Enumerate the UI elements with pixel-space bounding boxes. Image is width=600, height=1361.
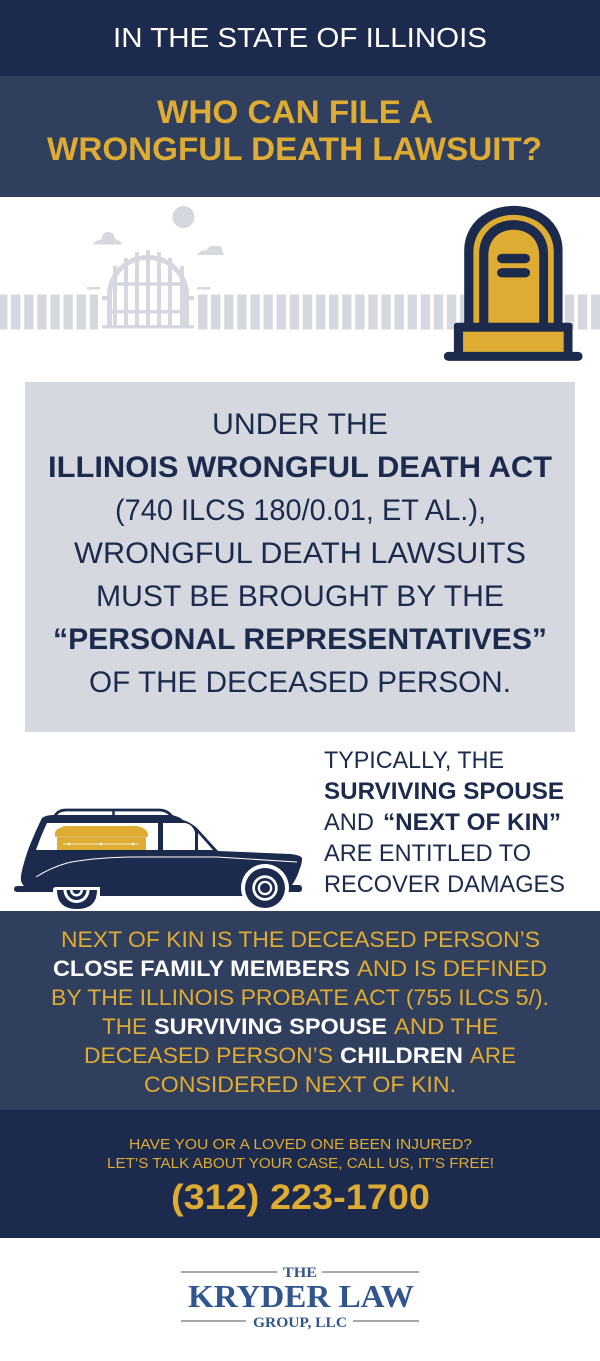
panel: Illinois Wrongful Death Act: MUST BE BROUGHT BY THE bbox=[96, 580, 504, 613]
text block: surviving spouse and next of kin: “NEXT OF KIN” bbox=[383, 809, 561, 836]
panel: call to action: LET’S TALK ABOUT YOUR CASE, CALL US, IT’S FREE! bbox=[107, 1155, 494, 1172]
panel: next of kin definition: NEXT OF KIN IS THE DECEASED PERSON’S bbox=[61, 927, 540, 952]
title banner: WRONGFUL DEATH LAWSUIT? bbox=[47, 131, 542, 167]
icon: tombstone bbox=[444, 206, 582, 361]
panel: Illinois Wrongful Death Act: UNDER THE bbox=[212, 408, 388, 441]
panel: next of kin definition: DECEASED PERSON’S bbox=[84, 1043, 333, 1068]
panel: next of kin definition: AND IS DEFINED bbox=[357, 956, 547, 981]
text block: surviving spouse and next of kin bbox=[324, 747, 565, 898]
text block: surviving spouse and next of kin: SURVIVING SPOUSE bbox=[324, 778, 564, 805]
text block: surviving spouse and next of kin: RECOVER DAMAGES bbox=[324, 871, 565, 898]
logo: The Kryder Law Group, LLC: THE bbox=[283, 1265, 317, 1281]
panel: next of kin definition: AND THE bbox=[394, 1014, 498, 1039]
top banner: IN THE STATE OF ILLINOIS bbox=[113, 22, 487, 53]
panel: Illinois Wrongful Death Act: WRONGFUL DEATH LAWSUITS bbox=[74, 537, 526, 570]
logo: The Kryder Law Group, LLC bbox=[181, 1265, 419, 1331]
panel: next of kin definition: ARE bbox=[470, 1043, 516, 1068]
panel: Illinois Wrongful Death Act: (740 ILCS 180/0.01, ET AL.), bbox=[115, 494, 486, 527]
text block: surviving spouse and next of kin: TYPICALLY, THE bbox=[324, 747, 504, 774]
text block: surviving spouse and next of kin: ARE ENTITLED TO bbox=[324, 840, 531, 867]
panel: next of kin definition: THE bbox=[102, 1014, 147, 1039]
icon: hearse with casket bbox=[14, 810, 302, 912]
title banner bbox=[0, 76, 600, 197]
panel: next of kin definition: SURVIVING SPOUSE bbox=[154, 1014, 387, 1039]
panel: next of kin definition bbox=[0, 911, 600, 1110]
logo: The Kryder Law Group, LLC: KRYDER LAW bbox=[188, 1278, 414, 1314]
panel: Illinois Wrongful Death Act: ILLINOIS WRONGFUL DEATH ACT bbox=[48, 451, 552, 484]
logo: The Kryder Law Group, LLC: GROUP, LLC bbox=[253, 1315, 347, 1331]
cemetery fence and gate illustration bbox=[0, 206, 600, 327]
panel: Illinois Wrongful Death Act bbox=[25, 382, 575, 732]
panel: Illinois Wrongful Death Act: OF THE DECEASED PERSON. bbox=[89, 666, 511, 699]
text block: surviving spouse and next of kin: AND bbox=[324, 809, 374, 836]
panel: Illinois Wrongful Death Act: “PERSONAL REPRESENTATIVES” bbox=[53, 623, 547, 656]
title banner: WHO CAN FILE A bbox=[157, 94, 433, 130]
panel: call to action: HAVE YOU OR A LOVED ONE BEEN INJURED? bbox=[129, 1136, 472, 1153]
panel: next of kin definition: CHILDREN bbox=[340, 1043, 463, 1068]
panel: next of kin definition: BY THE ILLINOIS PROBATE ACT (755 ILCS 5/). bbox=[51, 985, 549, 1010]
top banner bbox=[0, 0, 600, 76]
panel: next of kin definition: CONSIDERED NEXT OF KIN. bbox=[144, 1072, 456, 1097]
panel: call to action: (312) 223-1700 bbox=[171, 1178, 430, 1217]
panel: call to action bbox=[0, 1110, 600, 1238]
panel: next of kin definition: CLOSE FAMILY MEMBERS bbox=[53, 956, 350, 981]
